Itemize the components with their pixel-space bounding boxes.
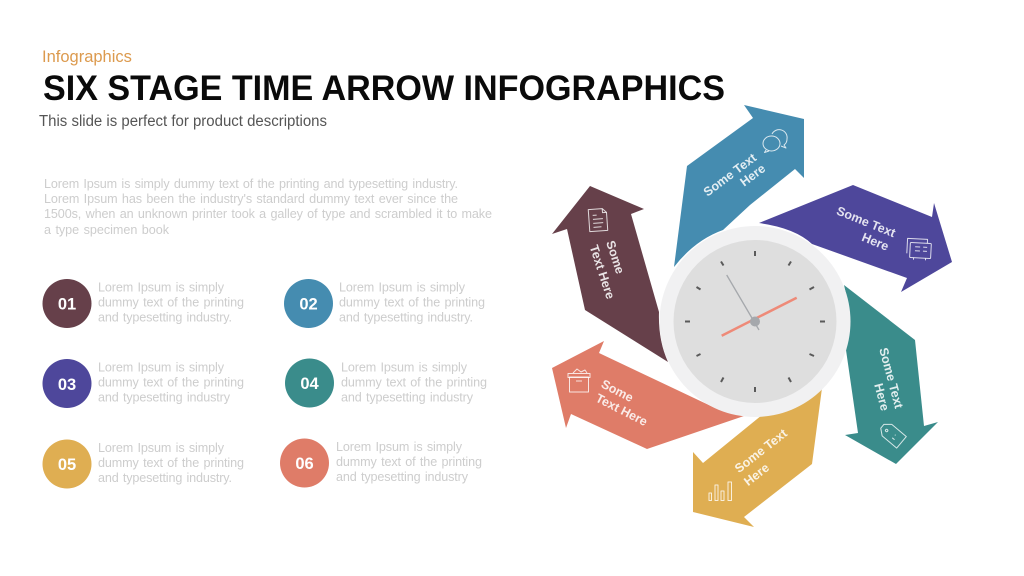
- list item 04: [285, 358, 487, 408]
- arrow 2: blue: Some Text: [701, 150, 760, 199]
- list item 05: and typesetting industry.: [98, 471, 232, 485]
- list item 04: and typesetting industry: [341, 390, 474, 404]
- list item 06: Lorem Ipsum is simply: [336, 440, 463, 454]
- list item 02: [284, 279, 485, 328]
- list item 01: 01: [58, 296, 76, 314]
- list item 03: 03: [58, 376, 76, 394]
- arrow 2: blue: Here: [737, 161, 768, 189]
- list item 05: [42, 440, 244, 488]
- list item 04: dummy text of the printing: [341, 376, 487, 390]
- list item 01: and typesetting industry.: [98, 310, 232, 324]
- list item 02: Lorem Ipsum is simply: [339, 280, 466, 294]
- icon: box: [568, 369, 590, 392]
- list item 03: and typesetting industry: [98, 390, 231, 404]
- list item 06: dummy text of the printing: [336, 455, 482, 469]
- arrow 5: yellow: Some Text: [732, 426, 791, 476]
- list item 05: dummy text of the printing: [98, 456, 244, 470]
- icon: bar chart: [709, 482, 732, 500]
- arrow 3: purple: [759, 185, 952, 292]
- arrow 2: blue: [674, 105, 804, 267]
- arrow 1: brown: Some: [603, 239, 627, 276]
- clock ticks: [685, 251, 825, 392]
- list item 01: Lorem Ipsum is simply: [98, 280, 225, 294]
- arrow 3: purple: Here: [860, 230, 891, 254]
- arrow 5: yellow: Here: [741, 461, 772, 489]
- list item 03: [42, 359, 244, 408]
- arrow 4: teal: Here: [871, 382, 892, 412]
- eyebrow label: Infographics: [42, 48, 132, 66]
- list item 01: [42, 279, 244, 328]
- icon: price tag: [878, 421, 906, 448]
- arrow 4: teal: [844, 285, 938, 464]
- subtitle: This slide is perfect for product descriptions: [39, 113, 327, 130]
- intro text block: Lorem Ipsum is simply dummy text of the printing and typesetting industry.: [44, 177, 458, 191]
- clock: [660, 226, 850, 417]
- list item 06: [280, 438, 482, 488]
- list item 04: Lorem Ipsum is simply: [341, 360, 468, 374]
- list item 02: 02: [299, 296, 318, 314]
- title: SIX STAGE TIME ARROW INFOGRAPHICS: [43, 69, 725, 108]
- list item 01: dummy text of the printing: [98, 296, 244, 310]
- list item 05: Lorem Ipsum is simply: [98, 441, 225, 455]
- icon: document: [588, 208, 608, 232]
- arrow 6: orange: [552, 341, 744, 449]
- list item 06: and typesetting industry: [336, 470, 469, 484]
- list item 05: 05: [58, 456, 76, 474]
- arrow 6: orange: Text Here: [593, 391, 650, 429]
- arrow 6: orange: Some: [599, 377, 636, 405]
- list item 02: dummy text of the printing: [339, 296, 485, 310]
- clock minute hand: [727, 275, 759, 330]
- intro text block: 1500s, when an unknown printer took a galley of type and scrambled it to make: [44, 207, 492, 221]
- clock hour hand: [722, 298, 797, 336]
- arrow 3: purple: Some Text: [834, 204, 898, 240]
- intro text block: a type specimen book: [44, 223, 170, 237]
- clock hub: [750, 316, 760, 326]
- list item 06: 06: [295, 455, 314, 473]
- arrow 4: teal: Some Text: [876, 346, 906, 411]
- icon: card: [906, 238, 932, 261]
- arrow 1: brown: [552, 186, 668, 362]
- icon: chat bubbles: [763, 130, 787, 152]
- intro text block: [44, 177, 492, 237]
- list item 03: dummy text of the printing: [98, 376, 244, 390]
- list item 03: Lorem Ipsum is simply: [98, 360, 225, 374]
- list item 04: 04: [300, 375, 319, 393]
- intro text block: Lorem Ipsum has been the industry's standard dummy text ever since the: [44, 192, 458, 206]
- list item 02: and typesetting industry.: [339, 310, 473, 324]
- arrow 1: brown: Text Here: [587, 243, 617, 301]
- arrow 5: yellow: [693, 388, 822, 527]
